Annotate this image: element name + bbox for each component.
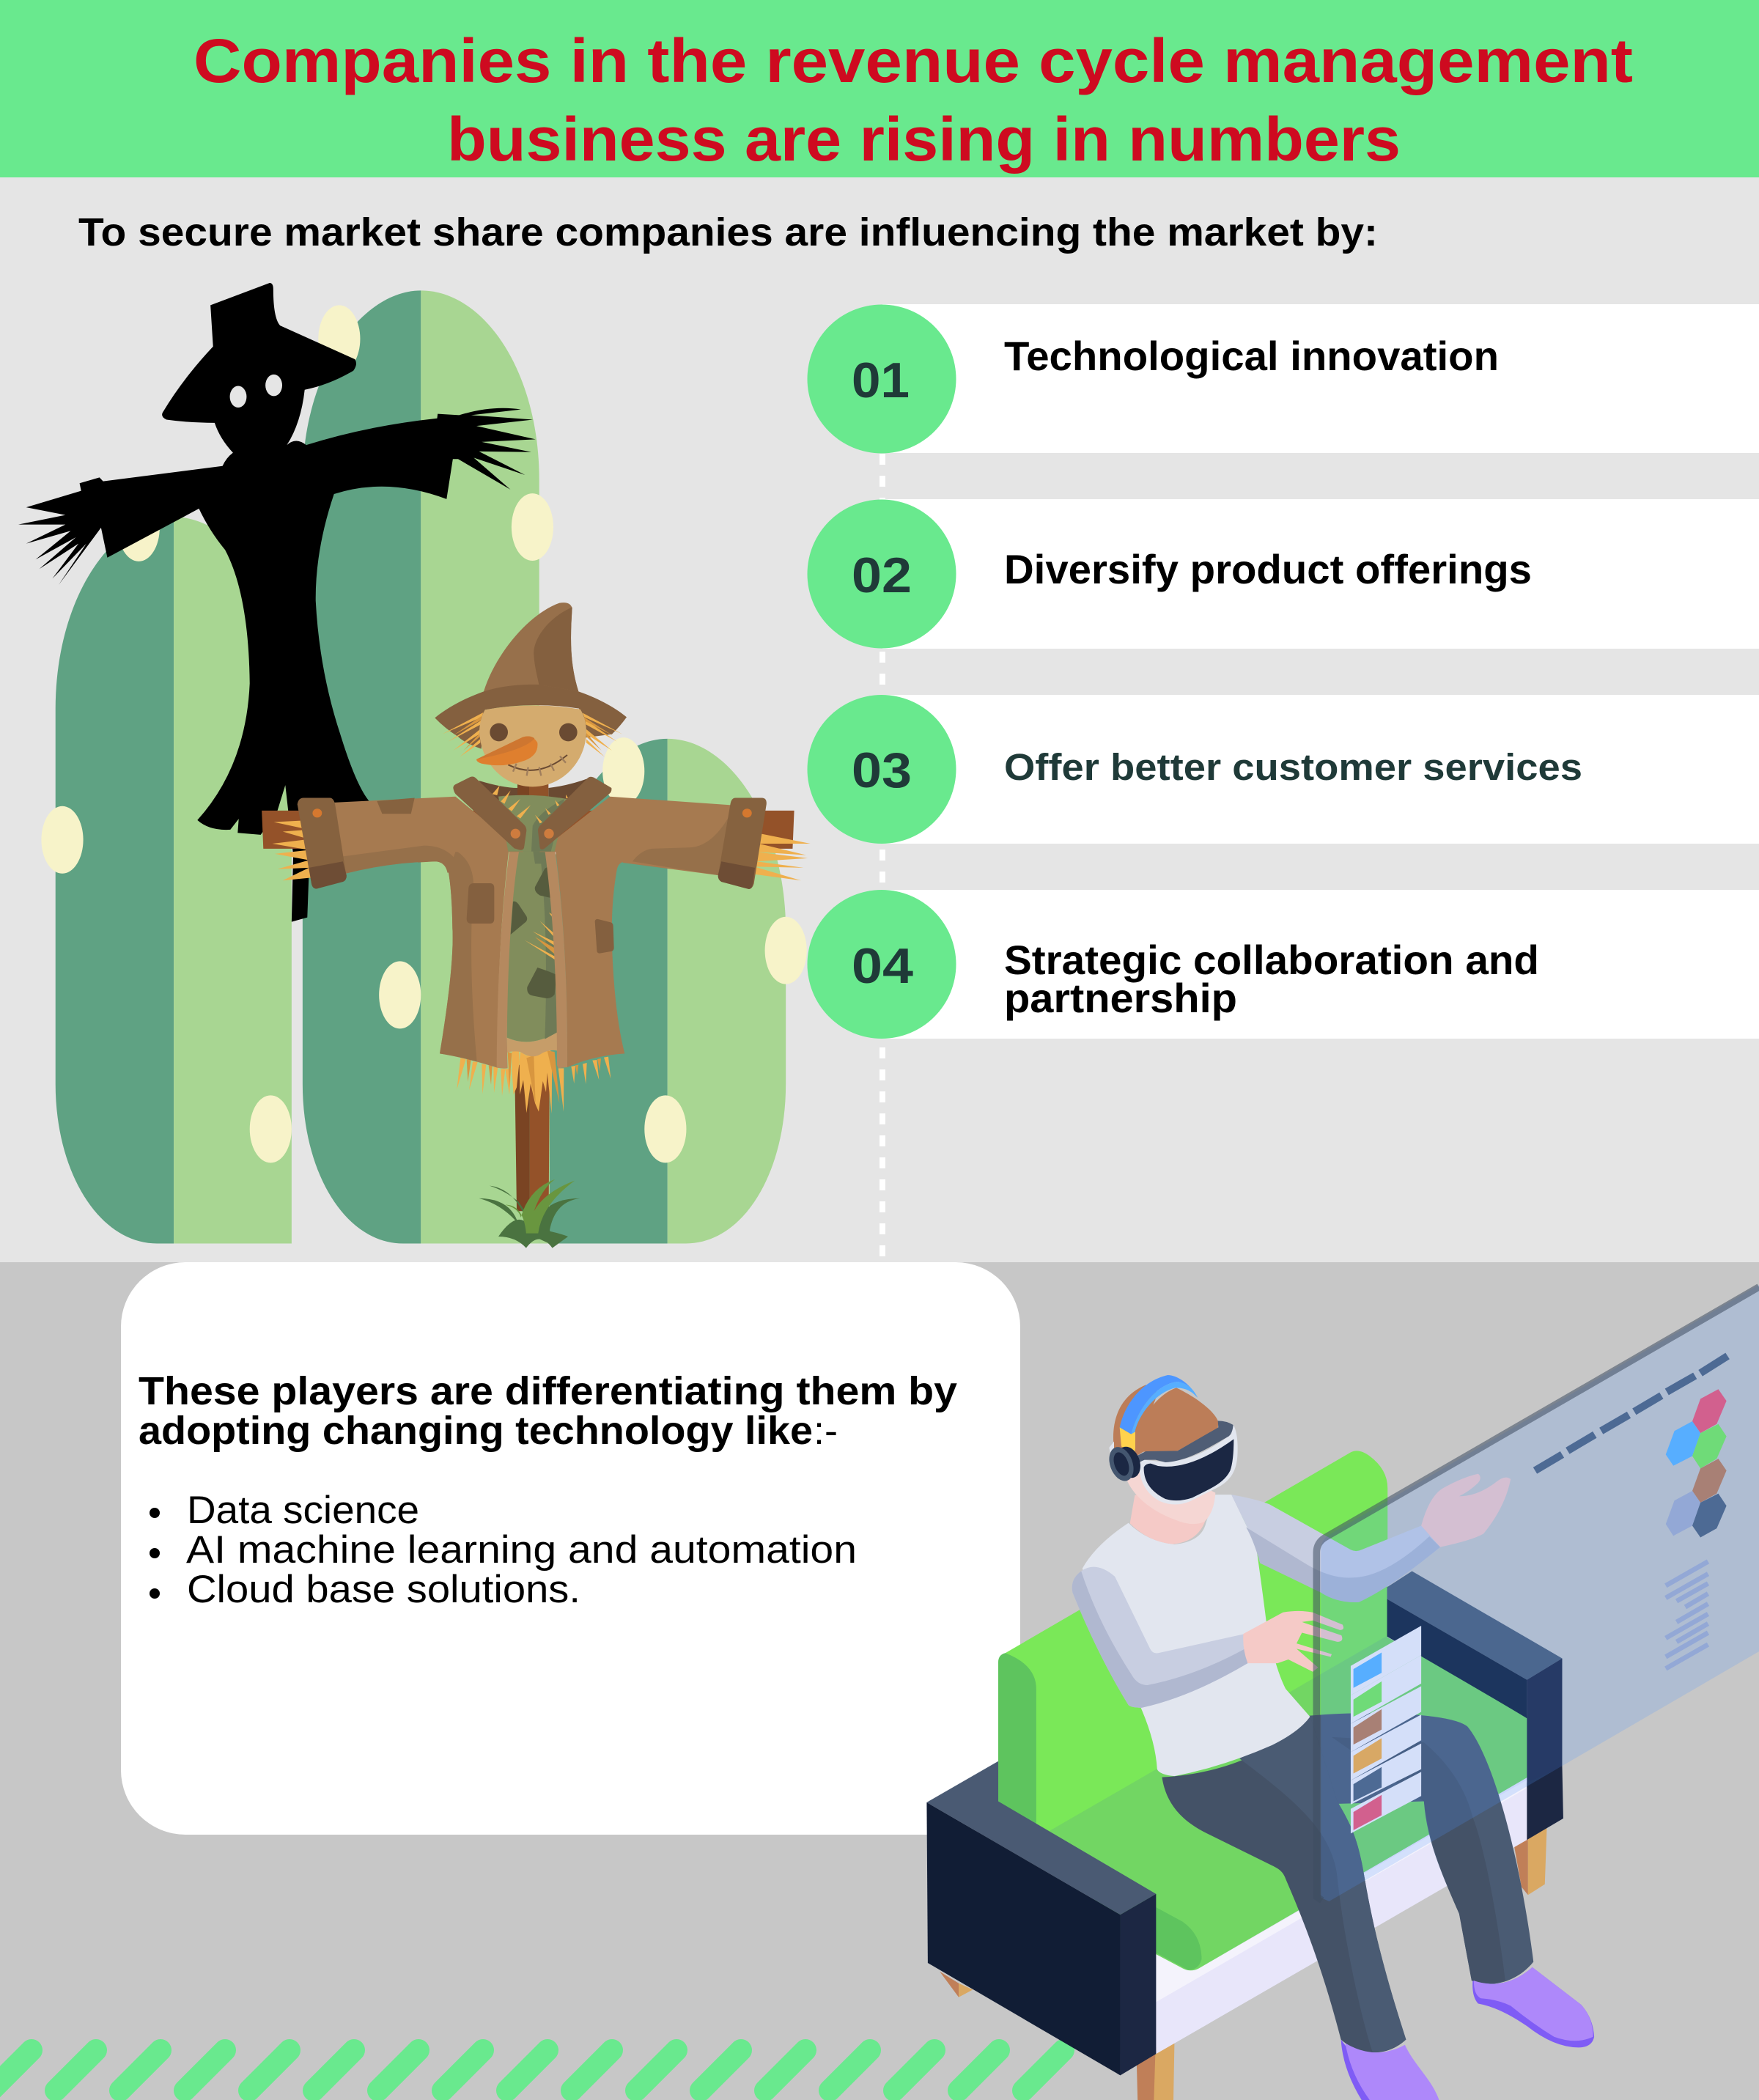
raised arm — [1231, 1495, 1440, 1601]
list item 03 — [808, 695, 1759, 844]
list item 02 — [808, 499, 1759, 649]
coat trim — [497, 844, 567, 1069]
upper shirt — [493, 786, 568, 852]
list item 01 — [808, 304, 1759, 453]
sofa — [926, 1451, 1563, 2100]
coat body, shirt and straw skirt — [396, 833, 662, 1113]
collars — [453, 776, 611, 850]
subheading: To secure market share companies are influencing the market by: — [78, 210, 1378, 254]
visor frame — [1139, 1424, 1238, 1504]
list item 04: 04 — [852, 938, 913, 994]
list item 02: 02 — [852, 548, 912, 603]
card: technology adoption: :- — [814, 1409, 838, 1453]
title banner: Companies in the revenue cycle management — [193, 26, 1633, 95]
glass panel — [1321, 1285, 1759, 1901]
grass tuft — [479, 1179, 580, 1248]
coat pockets — [467, 883, 614, 954]
left bush — [41, 494, 292, 1244]
straw hair — [442, 712, 622, 757]
torso — [1083, 1495, 1310, 1776]
title banner: business are rising in numbers — [447, 105, 1401, 174]
typing hand — [1243, 1611, 1343, 1672]
straw skirt — [457, 1047, 611, 1113]
headset band — [1120, 1375, 1198, 1434]
headset strap — [1137, 1421, 1233, 1462]
neck — [479, 778, 589, 800]
coat sleeves — [298, 797, 767, 889]
scarecrow illustration — [18, 283, 811, 1248]
right bush — [539, 737, 807, 1244]
list item 02: Diversify product offerings — [1004, 546, 1532, 592]
dashed line on panel — [1535, 1356, 1727, 1470]
coat shading left — [418, 845, 477, 1061]
green diagonal stripes — [0, 2050, 1063, 2090]
VR user on sofa illustration — [926, 1285, 1759, 2100]
middle bush — [303, 290, 553, 1244]
list item 04: partnership — [1004, 975, 1237, 1021]
card: technology adoption — [121, 1262, 1020, 1835]
raised hand — [1421, 1474, 1511, 1547]
list item 01: 01 — [852, 353, 910, 408]
text lines on panel — [1666, 1561, 1708, 1668]
face — [1126, 1471, 1215, 1524]
hat brim and cone — [435, 603, 627, 749]
list item 04: Strategic collaboration and — [1004, 937, 1539, 983]
bullet list — [150, 1489, 857, 1611]
list item 03: Offer better customer services — [1004, 746, 1582, 788]
title banner — [0, 0, 1759, 177]
back hair — [1113, 1385, 1158, 1456]
head with VR headset — [1105, 1375, 1238, 1544]
front hair — [1135, 1388, 1218, 1456]
list item 04 — [808, 890, 1759, 1039]
person body — [1072, 1474, 1594, 2100]
bullet list: AI machine learning and automation — [186, 1528, 857, 1572]
scarecrow head, hat and collars — [435, 603, 627, 852]
list item 03: 03 — [852, 743, 912, 798]
hexagon icons — [1666, 1389, 1727, 1538]
glass panel edge — [1316, 1287, 1759, 1901]
bullet list: Cloud base solutions. — [187, 1568, 580, 1611]
straw at sleeves — [272, 820, 811, 880]
list item 01: Technological innovation — [1004, 333, 1499, 379]
neck — [1130, 1481, 1215, 1544]
bushes and silhouette — [18, 283, 811, 1244]
lower arm — [1072, 1567, 1247, 1708]
card: technology adoption: adopting changing technology like — [139, 1409, 813, 1453]
visor glass — [1144, 1439, 1233, 1500]
bullet list: Data science — [187, 1489, 419, 1532]
dotted timeline — [880, 454, 885, 1256]
card heading: These players are differentiating them by — [139, 1369, 957, 1413]
black scarecrow silhouette — [18, 283, 536, 922]
coat body right — [554, 841, 662, 1067]
trousers — [1310, 1713, 1533, 1984]
glass panel and widgets — [1316, 1285, 1759, 1901]
wooden post and cross beam — [262, 811, 794, 1211]
shirt — [507, 833, 557, 1056]
mini cards on panel — [1351, 1626, 1421, 1833]
sleeve cuffs — [298, 798, 767, 889]
face — [476, 705, 586, 786]
shoes — [1472, 1967, 1594, 2047]
sofa and body — [926, 1451, 1594, 2100]
earphone — [1105, 1443, 1145, 1484]
coat body left — [396, 841, 510, 1068]
